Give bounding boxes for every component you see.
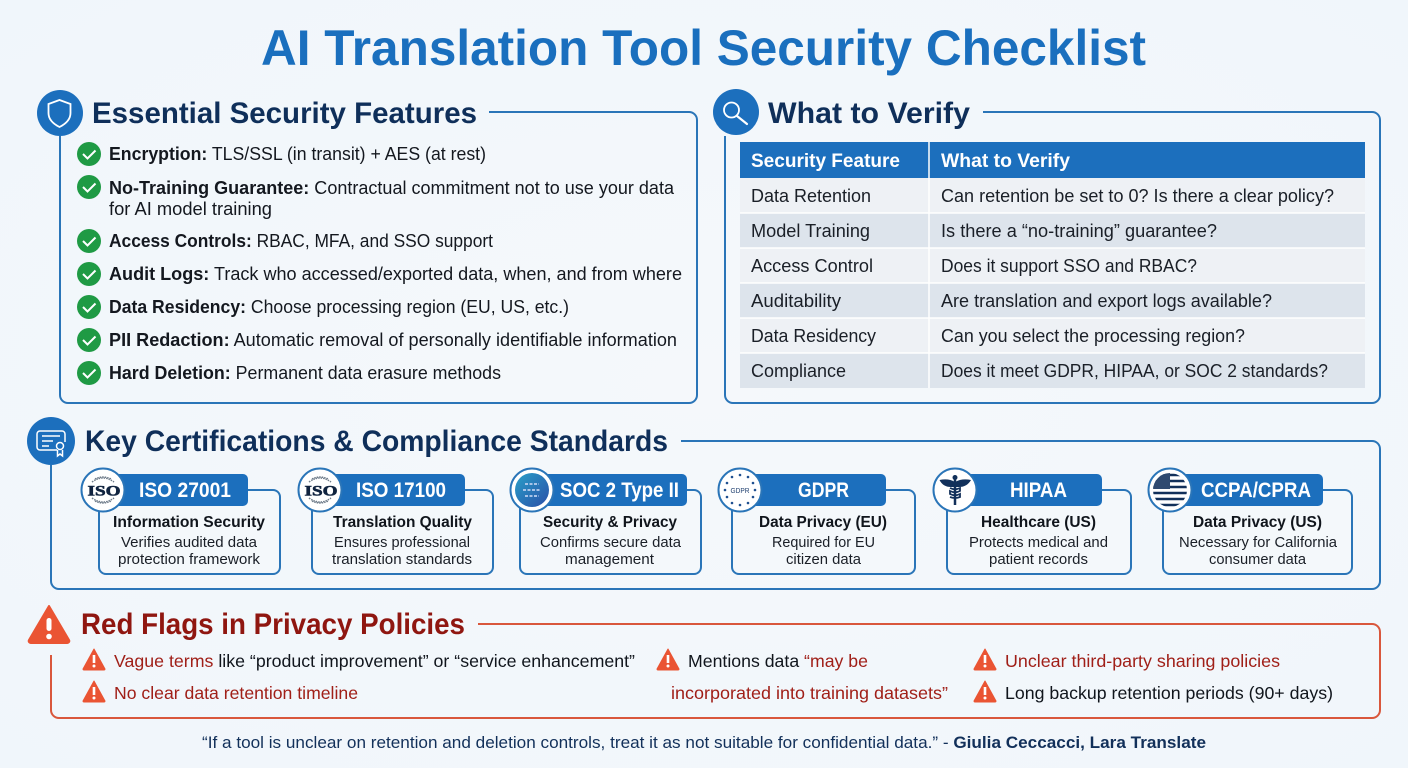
card: hipaa: Healthcare (US)	[981, 514, 1096, 531]
icon: magnifying glass	[713, 89, 759, 135]
card: iso 27001: ISO 27001	[139, 479, 231, 502]
card: ccpa/cpra: Data Privacy (US)	[1193, 514, 1322, 531]
card: gdpr: Required for EU	[772, 534, 875, 551]
red flag: no retention timeline: No clear data retention timeline	[114, 683, 358, 703]
panel: essential security features	[37, 90, 697, 403]
card: iso 27001: Verifies audited data	[121, 534, 258, 551]
card: ccpa/cpra	[1148, 468, 1352, 574]
card: gdpr: Data Privacy (EU)	[759, 514, 887, 531]
heading: what to verify: What to Verify	[768, 97, 970, 130]
card: iso 17100: ISO	[304, 484, 338, 500]
card: hipaa	[934, 468, 1131, 574]
feature: access controls: Access Controls: RBAC, MFA, and SSO support	[109, 230, 493, 251]
feature: pii redaction: PII Redaction: Automatic removal of personally identifiable information	[109, 329, 677, 350]
feature: audit logs: Audit Logs: Track who accessed/exported data, when, and from where	[109, 263, 682, 284]
red flag: training datasets: incorporated into training datasets”	[671, 683, 948, 703]
card: iso 17100: ISO 17100	[356, 479, 446, 502]
verification table: Data Residency	[751, 325, 877, 346]
card: soc 2 type ii: Confirms secure data	[540, 534, 682, 551]
card: soc 2 type ii	[510, 468, 701, 574]
heading: key certifications: Key Certifications & Compliance Standards	[85, 425, 668, 458]
panel: key certifications	[27, 417, 1380, 589]
feature: data residency: Data Residency: Choose processing region (EU, US, etc.)	[109, 296, 569, 317]
card: iso 17100: translation standards	[332, 551, 472, 568]
feature: no-training guarantee	[77, 175, 675, 219]
feature: hard deletion: Hard Deletion: Permanent data erasure methods	[109, 362, 501, 383]
card: gdpr	[718, 468, 915, 574]
red flag: vague terms: Vague terms like “product improvement” or “service enhancement”	[114, 651, 635, 671]
red flag: third-party sharing: Unclear third-party sharing policies	[1005, 651, 1280, 671]
card: ccpa/cpra: Necessary for California	[1179, 534, 1338, 551]
card: soc 2 type ii: management	[565, 551, 655, 568]
card: ccpa/cpra: consumer data	[1209, 551, 1307, 568]
card: iso 27001: protection framework	[118, 551, 260, 568]
verification table: Security Feature	[751, 151, 900, 172]
verification table: Compliance	[751, 360, 846, 381]
verification table: Is there a “no-training” guarantee?	[941, 220, 1217, 241]
card: iso 27001: ISO	[88, 484, 120, 500]
feature: no-training guarantee: for AI model training	[109, 198, 272, 219]
verification table: Auditability	[751, 290, 842, 311]
heading: essential security features: Essential Security Features	[92, 97, 477, 130]
card: iso 27001: Information Security	[113, 514, 265, 531]
verification table: Can you select the processing region?	[941, 325, 1245, 346]
verification table: Access Control	[751, 255, 873, 276]
card: hipaa: HIPAA	[1010, 479, 1067, 502]
icon: certificate	[27, 417, 75, 465]
verification table: Does it support SSO and RBAC?	[941, 255, 1197, 276]
card: hipaa: patient records	[989, 551, 1088, 568]
verification table: Can retention be set to 0? Is there a clear policy?	[941, 185, 1334, 206]
card: gdpr: citizen data	[786, 551, 862, 568]
card: iso 17100: Translation Quality	[333, 514, 472, 531]
verification table: Does it meet GDPR, HIPAA, or SOC 2 standards?	[941, 360, 1328, 381]
card: iso 27001	[82, 468, 280, 574]
verification table: What to Verify	[941, 151, 1070, 172]
heading: red flags: Red Flags in Privacy Policies	[81, 608, 465, 641]
feature: no-training guarantee: No-Training Guarantee: Contractual commitment not to use your data	[109, 177, 675, 198]
panel: what to verify	[713, 89, 1380, 403]
quote: “If a tool is unclear on retention and deletion controls, treat it as not suitable for confidential data.” - Giulia Ceccacci, Lara Translate	[202, 733, 1206, 752]
card: iso 17100	[298, 468, 493, 574]
card: iso 17100: Ensures professional	[334, 534, 470, 551]
card: ccpa/cpra: CCPA/CPRA	[1201, 479, 1311, 502]
verification table: Data Retention	[751, 185, 871, 206]
title: AI Translation Tool Security Checklist	[261, 20, 1146, 76]
panel: red flags	[29, 606, 1380, 718]
card: soc 2 type ii: Security & Privacy	[543, 514, 677, 531]
card: soc 2 type ii: SOC 2 Type II	[560, 479, 679, 502]
verification table: Are translation and export logs available?	[941, 290, 1272, 311]
red flag: backup retention: Long backup retention periods (90+ days)	[1005, 683, 1333, 703]
card: gdpr: GDPR	[798, 479, 849, 502]
feature: encryption: Encryption: TLS/SSL (in transit) + AES (at rest)	[109, 143, 486, 164]
card: gdpr: GDPR	[730, 486, 750, 495]
red flag: training datasets	[657, 649, 948, 703]
icon: warning triangle	[29, 606, 69, 643]
verification table	[740, 142, 1365, 388]
red flag: training datasets: Mentions data “may be	[688, 651, 868, 671]
verification table: Model Training	[751, 220, 870, 241]
card: hipaa: Protects medical and	[969, 534, 1108, 551]
icon: shield	[37, 90, 83, 136]
